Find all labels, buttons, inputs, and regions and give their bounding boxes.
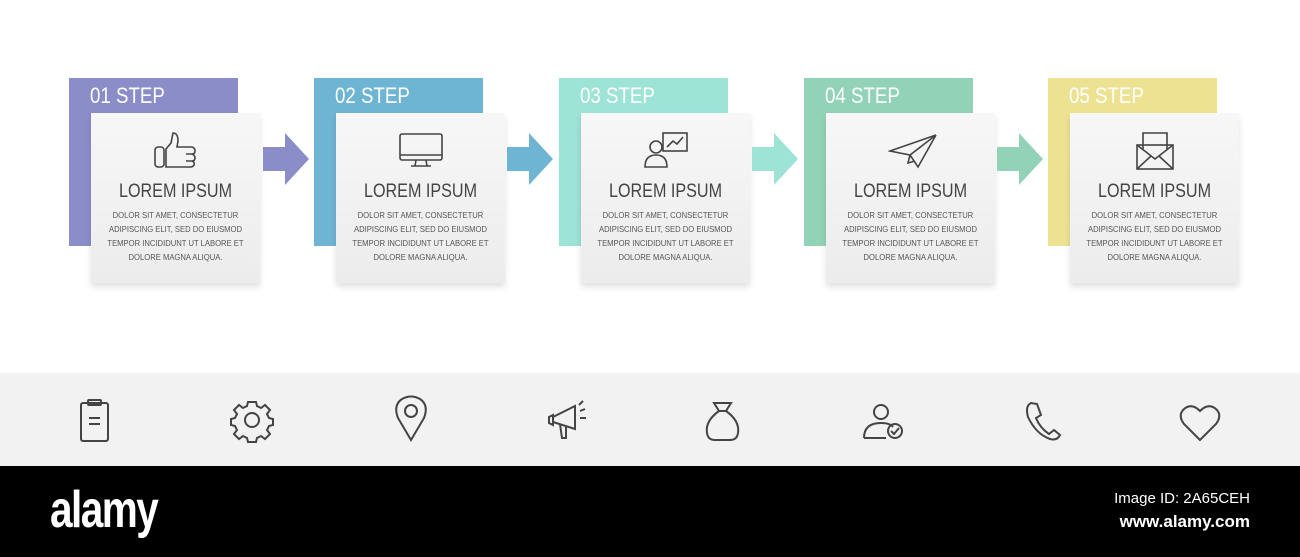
step 5: DOLOR SIT AMET, CONSECTETUR	[1092, 210, 1217, 220]
icon: location pin	[396, 396, 426, 440]
step 4: LOREM IPSUM	[854, 181, 967, 202]
step 4: ADIPISCING ELIT, SED DO EIUSMOD	[844, 224, 977, 234]
icon: megaphone	[549, 401, 586, 438]
icon: paper plane	[888, 134, 937, 168]
step 2: LOREM IPSUM	[364, 181, 477, 202]
step 3: TEMPOR INCIDIDUNT UT LABORE ET	[597, 238, 734, 248]
step 1	[69, 78, 262, 289]
step 1: TEMPOR INCIDIDUNT UT LABORE ET	[107, 238, 244, 248]
step 2: TEMPOR INCIDIDUNT UT LABORE ET	[352, 238, 489, 248]
icon: presenter	[644, 132, 688, 168]
icon: heart	[1181, 406, 1219, 440]
step 3	[559, 78, 752, 289]
step 3: DOLOR SIT AMET, CONSECTETUR	[603, 210, 728, 220]
icon: monitor	[399, 133, 443, 167]
icon: thumbs up	[154, 132, 196, 168]
icon: envelope	[1136, 132, 1174, 170]
icon: phone	[1027, 403, 1060, 440]
icon bar	[0, 373, 1300, 466]
step 3: 03 STEP	[580, 83, 655, 108]
arrow 4	[997, 133, 1043, 185]
arrow 1	[263, 133, 309, 185]
step 5: DOLORE MAGNA ALIQUA.	[1108, 252, 1201, 262]
step 3: DOLORE MAGNA ALIQUA.	[619, 252, 712, 262]
icon: clipboard	[81, 400, 108, 441]
step 5	[1048, 78, 1241, 289]
arrow 2	[507, 133, 553, 185]
step 5: LOREM IPSUM	[1098, 181, 1211, 202]
icon: user check	[864, 405, 902, 438]
logo: alamy	[50, 481, 157, 539]
step 1: ADIPISCING ELIT, SED DO EIUSMOD	[109, 224, 242, 234]
url: www.alamy.com	[1120, 512, 1250, 531]
step 2: DOLORE MAGNA ALIQUA.	[374, 252, 467, 262]
step 3: LOREM IPSUM	[609, 181, 722, 202]
icon: money bag	[707, 403, 738, 440]
step 3: ADIPISCING ELIT, SED DO EIUSMOD	[599, 224, 732, 234]
step 2: ADIPISCING ELIT, SED DO EIUSMOD	[354, 224, 487, 234]
step 1: LOREM IPSUM	[119, 181, 232, 202]
icon: gear	[231, 402, 273, 442]
step 1: DOLORE MAGNA ALIQUA.	[129, 252, 222, 262]
step 4: DOLOR SIT AMET, CONSECTETUR	[848, 210, 973, 220]
image id: Image ID: 2A65CEH	[1114, 490, 1250, 507]
step 1: 01 STEP	[90, 83, 165, 108]
step 5: TEMPOR INCIDIDUNT UT LABORE ET	[1086, 238, 1223, 248]
footer bar	[0, 466, 1300, 557]
step 4: TEMPOR INCIDIDUNT UT LABORE ET	[842, 238, 979, 248]
step 2: 02 STEP	[335, 83, 410, 108]
step 5: ADIPISCING ELIT, SED DO EIUSMOD	[1088, 224, 1221, 234]
step 2	[314, 78, 507, 289]
step 4: 04 STEP	[825, 83, 900, 108]
step 4	[804, 78, 997, 289]
step 5: 05 STEP	[1069, 83, 1144, 108]
step 1: DOLOR SIT AMET, CONSECTETUR	[113, 210, 238, 220]
step 4: DOLORE MAGNA ALIQUA.	[864, 252, 957, 262]
step 2: DOLOR SIT AMET, CONSECTETUR	[358, 210, 483, 220]
arrow 3	[752, 133, 798, 185]
